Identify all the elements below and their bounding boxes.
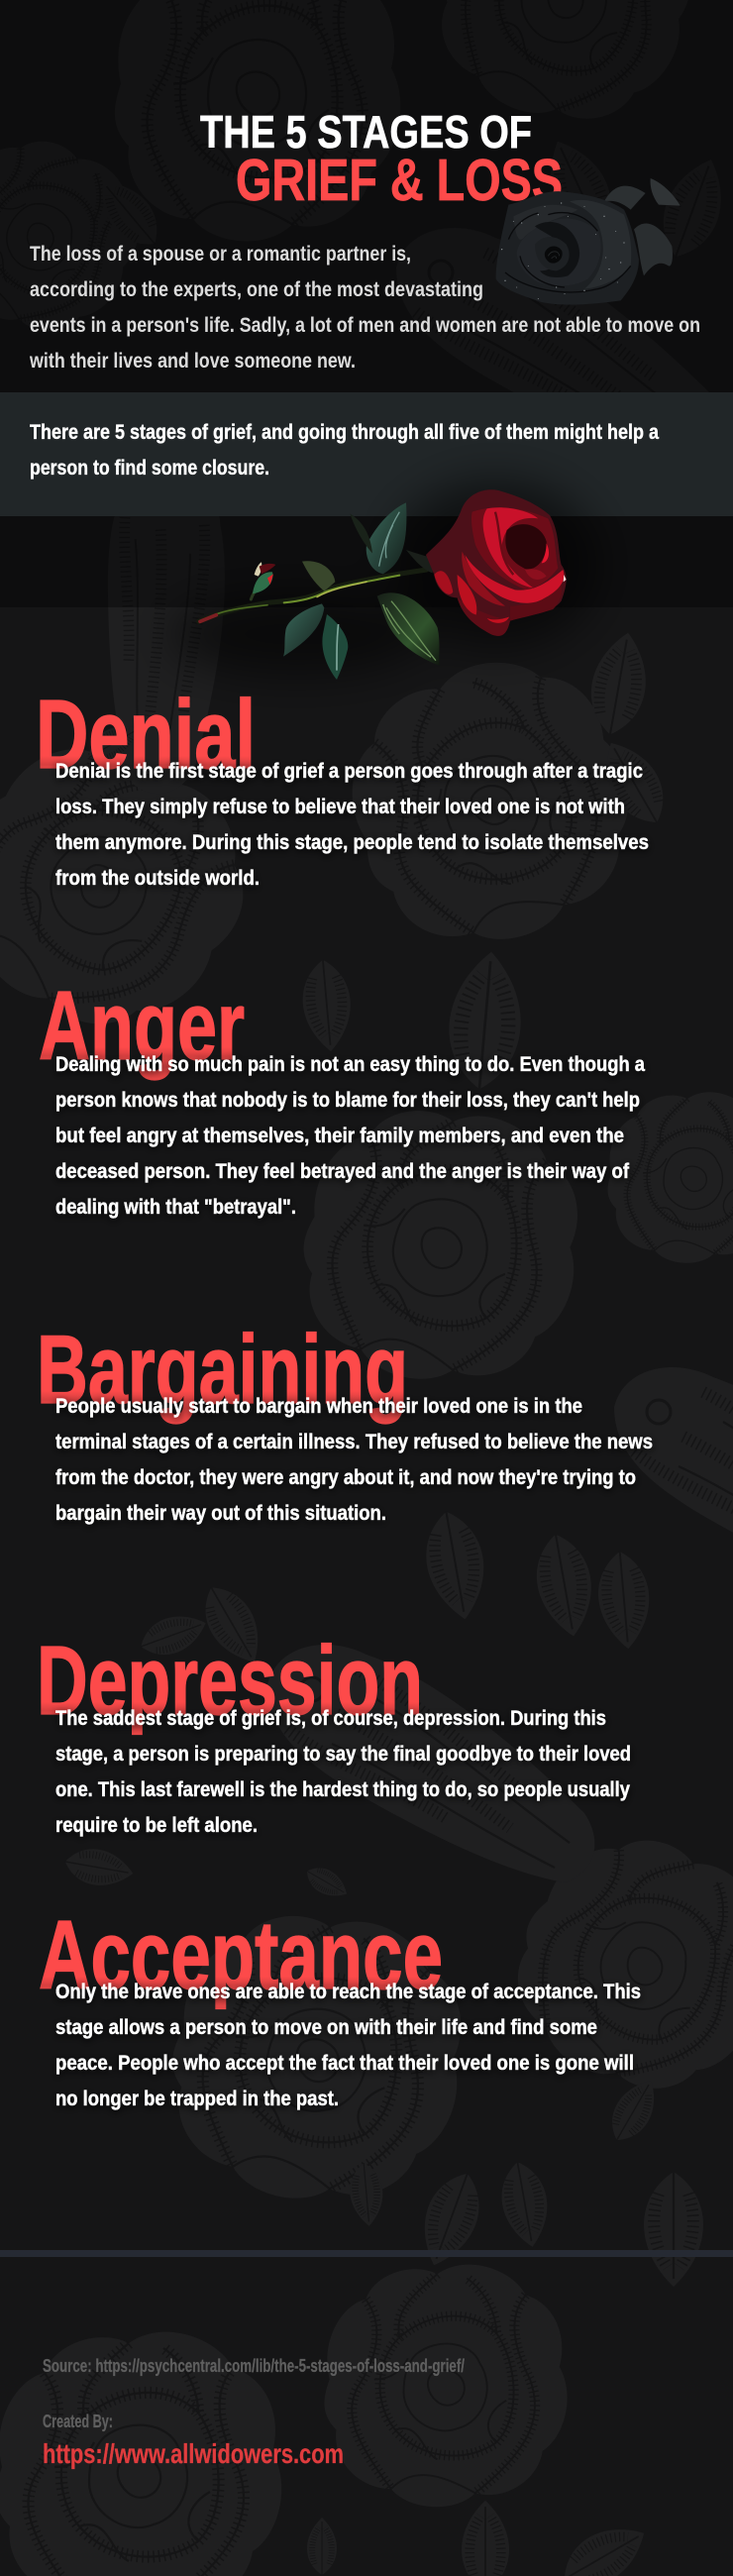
panel: Acceptance — [39, 1900, 641, 2110]
body: Acceptance: no longer be trapped in the past. — [55, 2088, 339, 2110]
body: Denial: loss. They simply refuse to believe that their loved one is not with — [55, 796, 625, 818]
body: Denial — [55, 760, 649, 890]
panel: Anger — [39, 971, 645, 1219]
rose shadow — [168, 481, 599, 674]
heading: Denial: Denial — [36, 680, 256, 789]
created by label: Created By: — [43, 2412, 113, 2431]
body: Denial: them anymore. During this stage, people tend to isolate themselves — [55, 831, 649, 854]
body: Denial: Denial is the first stage of grief a person goes through after a tragic — [55, 760, 643, 783]
body: Acceptance: stage allows a person to move on with their life and find some — [55, 2016, 597, 2039]
body: Bargaining: bargain their way out of this situation. — [55, 1502, 386, 1525]
body: Bargaining: terminal stages of a certain illness. They refused to believe the news — [55, 1431, 653, 1453]
body: Bargaining: from the doctor, they were angry about it, and now they're trying to — [55, 1466, 636, 1489]
band text: person to find some closure. — [30, 457, 269, 480]
band text — [30, 421, 659, 480]
icon: black rose — [496, 178, 681, 305]
panel: Bargaining — [37, 1315, 653, 1525]
bud — [253, 572, 272, 593]
title line 1: THE 5 STAGES OF — [200, 106, 532, 158]
body: Depression — [55, 1707, 631, 1837]
body: Denial: from the outside world. — [55, 867, 260, 890]
icon: red rose with stem — [199, 489, 567, 680]
body: Anger: dealing with that "betrayal". — [55, 1196, 296, 1219]
panel: Denial — [36, 680, 649, 890]
dark header overlay — [0, 0, 733, 607]
heading: Anger: Anger — [39, 971, 245, 1080]
stem — [199, 570, 427, 621]
footer divider — [0, 2250, 733, 2257]
title — [200, 106, 563, 213]
website link: https://www.allwidowers.com — [43, 2438, 344, 2469]
panel: Depression — [37, 1626, 631, 1837]
panel: intro band — [0, 392, 733, 516]
body: Anger: deceased person. They feel betrayed and the anger is their way of — [55, 1160, 630, 1183]
body: Anger: person knows that nobody is to blame for their loss, they can't help — [55, 1089, 640, 1112]
intro paragraph — [29, 243, 700, 373]
body: Depression: require to be left alone. — [55, 1814, 258, 1837]
body: Depression: one. This last farewell is the hardest thing to do, so people usually — [55, 1778, 630, 1801]
intro paragraph: with their lives and love someone new. — [29, 350, 356, 373]
body: Depression: stage, a person is preparing to say the final goodbye to their loved — [55, 1743, 631, 1766]
intro paragraph: according to the experts, one of the most devastating — [30, 278, 483, 301]
source line: Source: https://psychcentral.com/lib/the-5-stages-of-loss-and-grief/ — [43, 2356, 465, 2376]
body: Anger: but feel angry at themselves, their family members, and even the — [55, 1125, 624, 1147]
body: Acceptance: Only the brave ones are able to reach the stage of acceptance. This — [55, 1981, 641, 2003]
heading: Acceptance: Acceptance — [39, 1900, 443, 2009]
heading: Depression: Depression — [37, 1626, 423, 1735]
body: Bargaining: People usually start to bargain when their loved one is in the — [55, 1395, 582, 1418]
body: Anger — [55, 1053, 645, 1219]
body: Anger: Dealing with so much pain is not an easy thing to do. Even though a — [55, 1053, 645, 1076]
body: Depression: The saddest stage of grief is, of course, depression. During this — [55, 1707, 606, 1730]
body: Acceptance — [55, 1981, 641, 2110]
footer — [43, 2356, 465, 2469]
bloom — [406, 550, 434, 573]
heading: Bargaining: Bargaining — [37, 1315, 408, 1424]
leaves — [366, 502, 406, 574]
body: Acceptance: peace. People who accept the fact that their loved one is gone will — [55, 2052, 634, 2075]
intro paragraph: The loss of a spouse or a romantic partner is, — [30, 243, 411, 266]
title line 2: GRIEF & LOSS — [236, 148, 563, 213]
body: Bargaining — [55, 1395, 653, 1525]
